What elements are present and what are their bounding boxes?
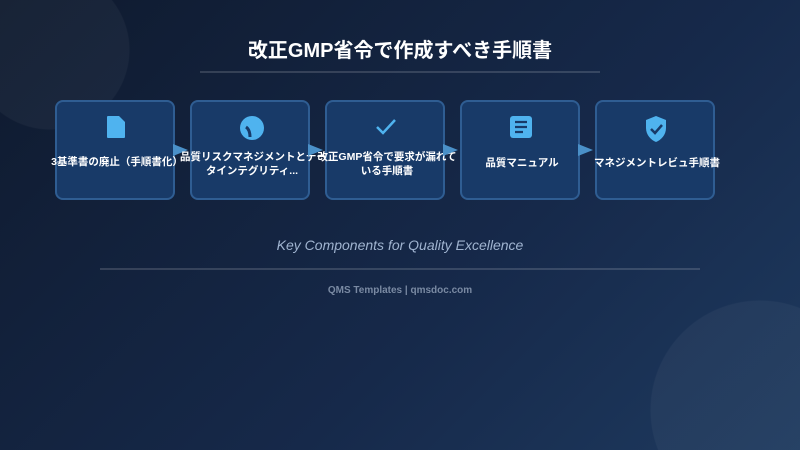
icon: shield (646, 116, 666, 142)
box 5 (595, 100, 715, 200)
footer: QMS Templates | qmsdoc.com (328, 285, 472, 296)
arrow 3 (443, 144, 458, 156)
box 4 (460, 100, 580, 200)
box 2 (190, 100, 310, 200)
title: 改正GMP省令で作成すべき手順書 (248, 40, 552, 62)
icon: check (376, 119, 396, 135)
label 3 (317, 150, 457, 177)
box 3 (325, 100, 445, 200)
box 1 (55, 100, 175, 200)
arrow 4 (578, 144, 593, 156)
arrow 2 (308, 144, 323, 156)
label 1: 3基準書の廃止（手順書化） (51, 156, 183, 168)
icon: list doc (510, 116, 532, 138)
subtitle: Key Components for Quality Excellence (277, 237, 523, 253)
label 5: マネジメントレビュ手順書 (594, 157, 720, 169)
label 2: 品質リスクマネジメントとデー (180, 151, 327, 163)
icon: document (107, 116, 125, 138)
label 2 (180, 151, 327, 177)
label 3: いる手順書 (361, 165, 413, 177)
label 3: 改正GMP省令で要求が漏れて (317, 151, 457, 163)
arrow 1 (173, 144, 188, 156)
label 2: タインテグリティ... (206, 165, 298, 177)
label 4: 品質マニュアル (485, 157, 559, 169)
icon: globe (240, 116, 264, 140)
